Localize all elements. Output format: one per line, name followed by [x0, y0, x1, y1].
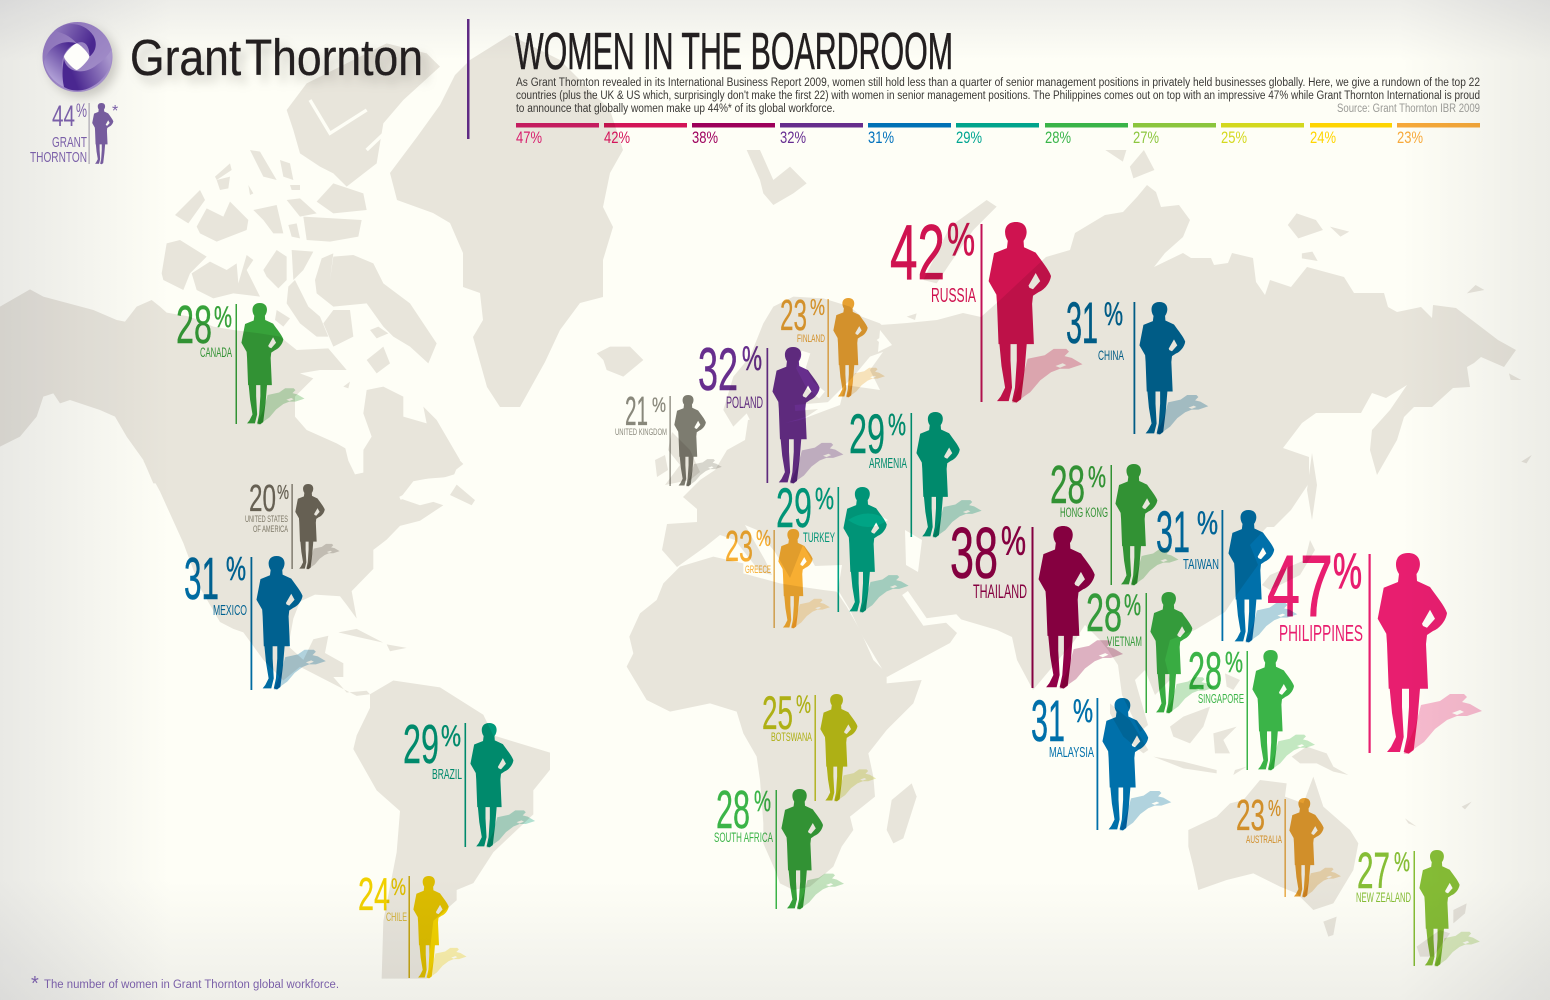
figure: Brazil 29%: [403, 713, 535, 848]
figure: Turkey 29%: 29: [776, 476, 812, 539]
figure: Armenia 29%: ARMENIA: [869, 456, 907, 472]
figure: New Zealand 27%: %: [1394, 847, 1410, 877]
landmass: Greenland: [390, 35, 623, 407]
logo mark: [42, 22, 112, 92]
figure: Singapore 28%: 28: [1188, 642, 1222, 701]
figure: United Kingdom 21%: 21: [625, 388, 648, 434]
figure: Taiwan 31%: TAIWAN: [1183, 556, 1219, 573]
figure: Taiwan 31%: [1156, 500, 1297, 643]
figure: New Zealand 27%: [1356, 842, 1480, 967]
figure: Canada 28%: CANADA: [200, 345, 232, 360]
figure: Poland 32%: [698, 336, 843, 484]
landmass: Japan and Sakhalin: [1262, 453, 1317, 590]
legend: 32%: [780, 128, 806, 147]
figure: United Kingdom 21%: UNITED KINGDOM: [615, 427, 667, 437]
figure: Mexico 31%: %: [226, 550, 246, 587]
logo wordmark: Grant Thornton: [130, 29, 423, 86]
figure: Philippines 47%: 47: [1267, 538, 1333, 635]
figure: Grant Thornton 44%: *: [112, 103, 118, 120]
legend: 25%: [1221, 128, 1247, 147]
figure: Russia 42%: 42: [890, 208, 945, 296]
figure: China 31%: CHINA: [1098, 347, 1124, 363]
figure: Poland 32%: 32: [698, 336, 738, 403]
figure: Grant Thornton 44%: GRANT: [52, 134, 87, 151]
legend: 23%: [1397, 128, 1423, 147]
figure: South Africa 28%: 28: [716, 780, 750, 840]
figure: Grant Thornton 44%: [30, 100, 118, 166]
landmass: British Isles: [655, 432, 700, 485]
figure: Armenia 29%: %: [888, 407, 906, 442]
intro text: to announce that globally women make up 44%* of its global workforce.: [516, 103, 835, 115]
figure: Singapore 28%: %: [1225, 647, 1243, 679]
figure: United States 20%: 20: [249, 478, 276, 520]
figure: South Africa 28%: SOUTH AFRICA: [714, 830, 773, 845]
legend: 27%: [1133, 128, 1159, 147]
figure: Chile 24%: %: [391, 874, 406, 901]
figure: Malaysia 31%: [1031, 689, 1171, 831]
figure: Turkey 29%: [776, 476, 909, 613]
legend: 24%: [1310, 128, 1336, 147]
footnote: *: [31, 973, 39, 995]
source note: Source: Grant Thornton IBR 2009: [1337, 103, 1480, 115]
figure: Malaysia 31%: %: [1073, 693, 1093, 729]
figure: Australia 23%: 23: [1236, 791, 1265, 840]
legend: 31%: [868, 128, 894, 147]
legend: 29%: [956, 128, 982, 147]
legend: 28%: [1045, 128, 1071, 147]
figure: United Kingdom 21%: [615, 388, 722, 486]
landmass: Eurasia: [662, 185, 1516, 732]
figure: Taiwan 31%: 31: [1156, 500, 1190, 565]
figure: Thailand 38%: [950, 514, 1123, 689]
footnote: [31, 973, 339, 995]
figure: Chile 24%: 24: [358, 868, 390, 920]
figure: Turkey 29%: TURKEY: [803, 529, 835, 545]
figure: Vietnam 28%: %: [1124, 589, 1141, 622]
figure: Chile 24%: CHILE: [386, 910, 407, 924]
inland seas and bays: [310, 87, 968, 632]
figure: United States 20%: [245, 478, 340, 569]
header divider: [467, 19, 470, 139]
figure: Malaysia 31%: MALAYSIA: [1049, 744, 1094, 761]
figure: Brazil 29%: %: [441, 720, 461, 753]
figure: Grant Thornton 44%: %: [76, 101, 87, 122]
figure: Turkey 29%: %: [815, 481, 834, 516]
figure: Canada 28%: %: [214, 301, 232, 334]
legend: [516, 123, 1480, 147]
figure: Canada 28%: [176, 295, 305, 425]
figure: Russia 42%: %: [947, 213, 975, 265]
figure: Grant Thornton 44%: 44: [52, 100, 75, 133]
figure: Finland 23%: [780, 291, 885, 397]
figure: Philippines 47%: %: [1333, 543, 1362, 599]
figure: Philippines 47%: [1267, 538, 1482, 754]
figure: Singapore 28%: SINGAPORE: [1198, 691, 1244, 706]
figure: Thailand 38%: THAILAND: [973, 582, 1027, 603]
figure: Botswana 25%: 25: [762, 686, 793, 739]
figure: Finland 23%: 23: [780, 291, 807, 340]
figure: Botswana 25%: BOTSWANA: [771, 732, 812, 744]
figure: Finland 23%: FINLAND: [797, 333, 825, 345]
figure: Thailand 38%: %: [1001, 518, 1026, 564]
figure: Greece 23%: %: [756, 525, 771, 551]
figure: New Zealand 27%: 27: [1357, 842, 1390, 899]
figure: Vietnam 28%: VIETNAM: [1107, 634, 1142, 649]
figure: China 31%: 31: [1066, 291, 1098, 356]
figure: United States 20%: %: [277, 482, 289, 504]
figure: Finland 23%: %: [810, 294, 825, 320]
figure: Australia 23%: AUSTRALIA: [1246, 834, 1282, 846]
figure: United States 20%: OF AMERICA: [253, 524, 288, 534]
figure: Botswana 25%: [762, 686, 876, 802]
legend: 47%: [516, 128, 542, 147]
figure: Hong Kong 28%: %: [1088, 461, 1106, 494]
title: WOMEN IN THE BOARDROOM: [515, 23, 953, 81]
figure: Malaysia 31%: 31: [1031, 689, 1065, 754]
figure: Armenia 29%: [849, 402, 982, 538]
figure: United Kingdom 21%: %: [652, 394, 666, 417]
figure: Mexico 31%: [184, 546, 326, 690]
footnote: The number of women in Grant Thornton global workforce.: [44, 979, 339, 991]
figure: China 31%: %: [1104, 296, 1123, 332]
intro text: [516, 77, 1480, 115]
figure: Armenia 29%: 29: [849, 402, 885, 465]
figure: Greece 23%: [725, 522, 830, 628]
figure: Brazil 29%: BRAZIL: [432, 767, 462, 783]
figure: Poland 32%: POLAND: [726, 393, 763, 412]
figure: Philippines 47%: PHILIPPINES: [1279, 620, 1363, 646]
figure: Taiwan 31%: %: [1197, 505, 1218, 541]
figure: South Africa 28%: %: [754, 786, 771, 818]
figure: Greece 23%: GREECE: [745, 564, 771, 576]
figure: Greece 23%: 23: [725, 522, 753, 571]
figure: South Africa 28%: [714, 780, 844, 910]
figure: Russia 42%: RUSSIA: [931, 285, 976, 307]
figure: Australia 23%: [1236, 791, 1341, 897]
figure: Poland 32%: %: [742, 340, 762, 378]
figure: Botswana 25%: %: [796, 691, 811, 719]
figure: Russia 42%: [890, 208, 1082, 403]
figure: Hong Kong 28%: HONG KONG: [1060, 505, 1108, 520]
figure: New Zealand 27%: NEW ZEALAND: [1356, 890, 1411, 905]
figure: China 31%: [1066, 291, 1208, 435]
figure: Vietnam 28%: [1086, 583, 1214, 714]
figure: Mexico 31%: MEXICO: [213, 602, 247, 619]
figure: Vietnam 28%: 28: [1086, 583, 1122, 643]
figure: Australia 23%: %: [1268, 795, 1281, 821]
figure: Hong Kong 28%: 28: [1050, 455, 1085, 515]
figure: Grant Thornton 44%: THORNTON: [30, 149, 87, 166]
figure: Chile 24%: [358, 868, 467, 979]
figure: United States 20%: UNITED STATES: [245, 514, 288, 524]
figure: Brazil 29%: 29: [403, 713, 439, 775]
legend: 42%: [604, 128, 630, 147]
figure: Hong Kong 28%: [1050, 455, 1179, 586]
figure: Canada 28%: 28: [176, 295, 212, 355]
legend: 38%: [692, 128, 718, 147]
figure: Mexico 31%: 31: [184, 546, 219, 612]
figure: Singapore 28%: [1188, 642, 1315, 771]
figure: Thailand 38%: 38: [950, 514, 998, 594]
